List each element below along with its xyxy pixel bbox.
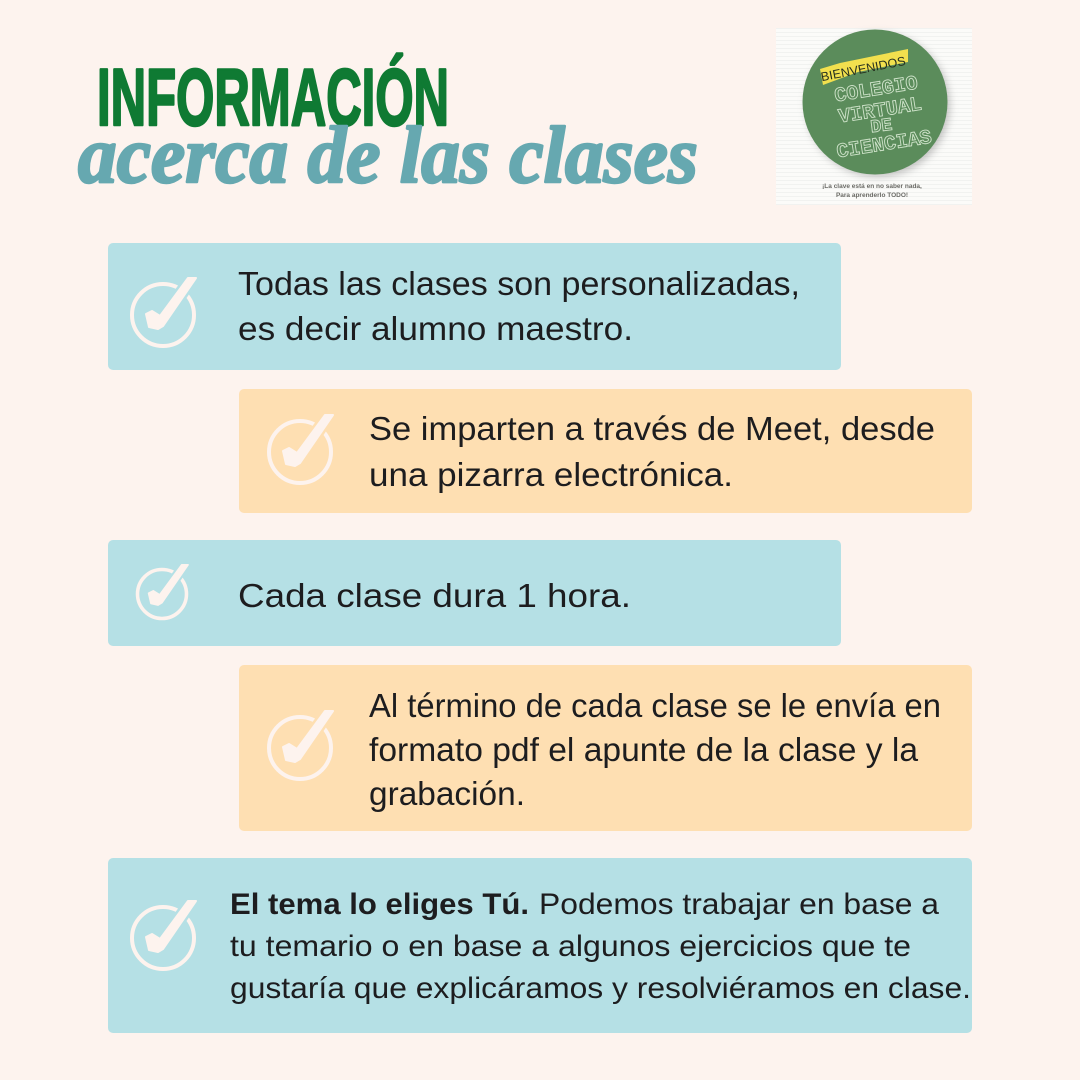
logo name: CIENCIAS <box>835 127 934 164</box>
title <box>78 52 698 200</box>
text: Podemos trabajar en base a <box>539 888 939 921</box>
panel: el tema lo eliges tú <box>108 858 972 1033</box>
logo name: VIRTUAL <box>837 94 924 129</box>
logo: Colegio Virtual de Ciencias <box>776 28 972 205</box>
text <box>369 410 935 493</box>
text: gustaría que explicáramos y resolviéramos en clase. <box>230 972 971 1005</box>
text: grabación. <box>369 775 525 812</box>
panel: clases personalizadas <box>108 243 841 370</box>
text: una pizarra electrónica. <box>369 456 733 493</box>
panel: apunte y grabación <box>239 665 972 831</box>
logo tagline: Para aprenderlo TODO! <box>836 192 908 199</box>
panel: Meet y pizarra <box>239 389 972 513</box>
icon: check <box>138 565 188 618</box>
icon: check <box>269 711 333 779</box>
text: formato pdf el apunte de la clase y la <box>369 731 919 768</box>
text: El tema lo eliges Tú. <box>230 888 529 921</box>
icon: check <box>132 901 196 969</box>
text <box>238 265 800 347</box>
text <box>230 888 971 1005</box>
text: Al término de cada clase se le envía en <box>369 687 941 724</box>
text <box>369 687 941 812</box>
icon: check <box>132 278 196 346</box>
text: Se imparten a través de Meet, desde <box>369 410 935 447</box>
text: es decir alumno maestro. <box>238 310 633 347</box>
logo tagline <box>822 183 922 199</box>
text: tu temario o en base a algunos ejercicios que te <box>230 930 911 963</box>
icon: check <box>269 415 333 483</box>
heading: INFORMACIÓN: INFORMACIÓN <box>97 52 449 143</box>
logo tagline: ¡La clave está en no saber nada, <box>822 183 922 190</box>
logo name: COLEGIO <box>833 73 920 108</box>
logo name <box>833 73 934 164</box>
panel: duración <box>108 540 841 646</box>
logo banner: Bienvenidos: BIENVENIDOS <box>820 54 907 84</box>
text: Todas las clases son personalizadas, <box>238 265 800 302</box>
logo name: DE <box>870 116 894 138</box>
heading: acerca de las clases: acerca de las clases <box>78 112 698 200</box>
text: Cada clase dura 1 hora. <box>238 577 631 614</box>
